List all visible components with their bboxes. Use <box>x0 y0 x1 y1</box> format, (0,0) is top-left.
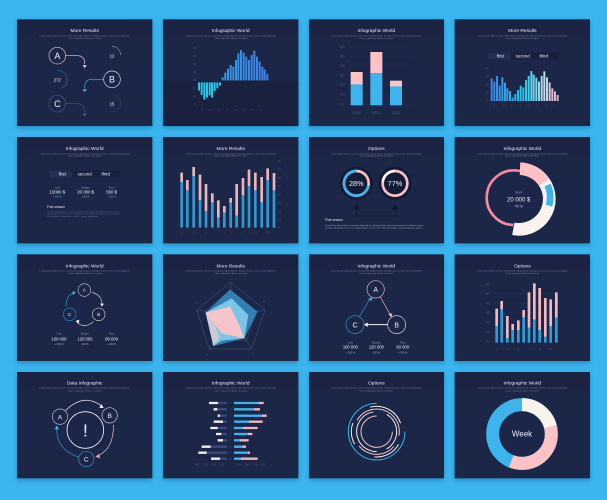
axis labels <box>486 282 553 351</box>
axis labels: 7 <box>554 103 556 107</box>
description: Cras vulputate libero sit amet <box>68 272 103 275</box>
stacked bars <box>351 52 402 105</box>
axis labels: 1 <box>230 401 232 405</box>
axis labels: 8 <box>230 444 232 448</box>
axis labels: 400 <box>261 463 266 467</box>
left white bars <box>198 403 223 459</box>
axis labels <box>340 44 401 115</box>
description <box>477 34 568 40</box>
axis labels: 2 <box>511 103 513 107</box>
description: Cras vulputate libero sit amet <box>214 155 249 158</box>
triangle diagram: A <box>373 287 378 294</box>
center text: 75 % <box>514 204 524 208</box>
axis labels: 300 <box>203 463 208 467</box>
axis labels: 50 <box>278 184 281 188</box>
stat: last: + 200 % <box>54 343 64 346</box>
axis labels <box>193 46 262 112</box>
panel: data infographic cycle <box>17 372 152 478</box>
description <box>477 152 568 158</box>
node B: B <box>107 413 112 420</box>
axis labels: 3 <box>230 413 232 417</box>
arrow C to A <box>55 425 79 457</box>
stat: last: 100 000 <box>51 336 67 341</box>
axis labels: 40 <box>193 70 197 74</box>
axis labels: 60 <box>340 44 345 49</box>
axis labels: 20 <box>340 82 345 87</box>
season heading: First season <box>47 205 65 209</box>
title: Data Infographic <box>67 381 103 387</box>
axis labels: 30 <box>340 72 345 77</box>
description: Lorem ipsum dolor sit amet, consectetur adipiscing elit. Quisque facilisis, enim rutrum imperdiet <box>477 34 568 37</box>
axis labels: 7 <box>528 347 530 351</box>
stat: next: Next <box>109 185 115 189</box>
description: Cras vulputate libero sit amet <box>506 155 540 158</box>
axis labels: 20 <box>486 320 490 324</box>
axis labels: 2 <box>230 407 232 411</box>
axis labels: 0 <box>279 226 281 230</box>
concentric arc chart <box>346 401 408 463</box>
triangle diagram: C <box>352 322 358 329</box>
stat: budget: Budget <box>372 340 381 344</box>
axis labels: 30 <box>486 311 490 315</box>
donut chart <box>493 405 551 463</box>
axis labels: 1 <box>502 103 504 107</box>
cycle diagram <box>63 284 105 326</box>
axis labels: 50 <box>193 62 197 66</box>
radar labels: C <box>252 352 254 356</box>
stat: budget <box>77 332 93 346</box>
stat: next: + 200 % <box>398 351 408 354</box>
axis labels: 400 <box>195 463 200 467</box>
title: More Results <box>216 263 245 269</box>
stat: next <box>105 332 119 346</box>
axis labels: 3 <box>519 103 521 107</box>
description <box>40 34 131 40</box>
tabs: third <box>101 172 110 177</box>
axis labels <box>181 159 281 234</box>
axis labels: 7 <box>230 438 232 442</box>
cycle diagram: B <box>97 312 100 317</box>
axis labels: 30 <box>193 78 197 82</box>
axis labels: 11 <box>549 347 553 351</box>
axis labels: 60 <box>193 54 197 58</box>
season text: Ut nulla, pellentesque lectus, cras vulputate libero sit amet nunc. Phasellus dapibus, nulla vitae egestas sodales <box>325 227 423 230</box>
axis labels: 20 <box>193 86 197 90</box>
axis labels: 10 <box>278 218 281 222</box>
stat: next: Next <box>109 332 115 336</box>
axis labels: 70 <box>278 167 281 171</box>
description: Lorem ipsum dolor sit amet, consectetur adipiscing elit. Quisque facilisis, enim rutrum imperdiet <box>331 387 422 390</box>
title: Options <box>514 263 531 269</box>
description: Lorem ipsum dolor sit amet, consectetur adipiscing elit. Quisque facilisis, enim rutrum imperdiet <box>186 34 277 37</box>
axis labels: 50 <box>340 53 345 58</box>
season text: Phasellus dapibus, nulla vitae egestas <box>47 215 99 218</box>
center text <box>507 190 531 208</box>
axis labels: 10 <box>340 91 345 96</box>
axis labels: 3 <box>193 230 195 234</box>
description: Lorem ipsum dolor sit amet, consectetur adipiscing elit. Quisque facilisis, enim rutrum imperdiet <box>477 269 568 272</box>
panel: options stacked bars <box>455 254 590 361</box>
title: Options <box>368 381 385 387</box>
radar series <box>206 289 258 346</box>
axis labels: 200 <box>212 463 217 467</box>
node C with arrow: C <box>54 99 61 109</box>
center text: 20 000 $ <box>507 197 531 203</box>
stat: budget: 120 % <box>82 196 90 199</box>
triangle diagram <box>346 281 406 334</box>
radar labels: A <box>230 277 232 281</box>
axis labels: 10 <box>486 330 490 334</box>
axis labels: 6 <box>545 103 547 107</box>
axis labels: 70 <box>193 46 197 50</box>
description: Cras vulputate libero sit amet <box>506 37 540 40</box>
panel: butterfly bar chart <box>163 372 298 478</box>
stat: budget: 120 000 <box>77 336 93 341</box>
description: Lorem ipsum dolor sit amet, consectetur adipiscing elit. Quisque facilisis, enim rutrum imperdiet <box>331 152 422 155</box>
tabs: third <box>539 54 548 59</box>
panel: two percentage rings <box>309 137 444 243</box>
season text: Lorem ipsum dolor sit amet, consectetur adipiscing elit. Quisque facilisis <box>47 210 121 213</box>
description: Cras vulputate libero sit amet <box>214 37 249 40</box>
axis labels: 60 <box>278 176 281 180</box>
blue bar bases <box>497 309 556 343</box>
panel: tabs with stats <box>17 137 152 243</box>
axis labels: 20 <box>486 82 489 86</box>
description: Cras vulputate libero sit amet <box>68 389 103 392</box>
stat: last <box>343 340 359 354</box>
left dark bars <box>207 403 227 459</box>
title: Infographic World <box>503 146 542 152</box>
description: Cras vulputate libero sit amet <box>360 37 394 40</box>
title: Infographic World <box>66 146 104 152</box>
tabs <box>49 171 121 178</box>
axis labels: 6 <box>230 432 232 436</box>
axis labels: 6 <box>252 108 254 112</box>
axis labels: 0 <box>486 99 488 103</box>
stat: budget: 120 % <box>81 343 89 346</box>
stat: next: 80 000 <box>396 345 410 350</box>
stat: next: 550 $ <box>106 190 118 195</box>
axis labels: 5 <box>243 108 245 112</box>
axis labels: 0 <box>341 101 344 106</box>
white segment <box>513 182 549 229</box>
description: Lorem ipsum dolor sit amet, consectetur adipiscing elit. Quisque facilisis, enim rutrum imperdiet <box>40 152 131 155</box>
panel: radar chart <box>163 254 298 361</box>
axis labels: 15 <box>266 230 270 234</box>
donut label: Week <box>512 430 532 439</box>
panel: more results flow <box>17 19 152 126</box>
bars <box>492 71 558 101</box>
value 12: 12 <box>110 53 115 58</box>
description <box>40 387 131 392</box>
axis labels <box>195 401 266 467</box>
description: Cras vulputate libero sit amet <box>360 272 394 275</box>
panel: stacked bars three years <box>309 19 444 126</box>
description: Lorem ipsum dolor sit amet, consectetur adipiscing elit. Quisque facilisis, enim rutrum imperdiet <box>186 269 277 272</box>
axis labels: 9 <box>230 230 232 234</box>
description <box>186 34 277 40</box>
radar labels: B <box>263 300 265 304</box>
axis labels: 100 <box>236 463 241 467</box>
stat: next: Next <box>400 340 406 344</box>
description <box>186 387 277 392</box>
stat: budget: Budget <box>81 332 89 336</box>
description: Cras vulputate libero sit amet <box>214 389 249 392</box>
axis labels: 1 <box>209 108 211 112</box>
lower band <box>163 81 298 126</box>
description <box>331 152 422 158</box>
arrow B to C <box>95 425 113 458</box>
axis labels: 2 <box>218 108 220 112</box>
blue segment <box>548 185 550 206</box>
description: Cras vulputate libero sit amet <box>68 37 103 40</box>
description: Cras vulputate libero sit amet <box>506 272 540 275</box>
stat: budget: 120 000 <box>369 345 385 350</box>
radar labels: E <box>196 300 198 304</box>
center text: Sum <box>515 190 522 194</box>
stat: next: 80 000 <box>105 336 119 341</box>
stat: budget: 20 000 $ <box>77 190 95 195</box>
stat: last: Last <box>56 332 62 336</box>
axis labels: 13 <box>254 230 257 234</box>
tabs <box>488 52 559 59</box>
panel: triangle ABC with stats <box>309 254 444 361</box>
stat: last: 100 000 <box>343 345 359 350</box>
axis labels: 5 <box>205 230 207 234</box>
description: Cras vulputate libero sit amet <box>360 155 394 158</box>
description: Lorem ipsum dolor sit amet, consectetur adipiscing elit. Quisque facilisis, enim rutrum imperdiet <box>40 387 131 390</box>
cycle diagram: C <box>68 312 72 317</box>
radar grid <box>197 282 265 349</box>
triangle diagram: B <box>394 322 399 329</box>
value 15: 15 <box>110 101 115 106</box>
axis labels: 40 <box>340 63 345 68</box>
right pink bars <box>240 403 267 459</box>
grid lines <box>348 47 412 104</box>
central alert circle: ! <box>83 420 88 440</box>
stat: budget: Budget <box>81 185 90 189</box>
ring 28%: 28% <box>349 179 364 188</box>
axis labels: 7 <box>218 230 220 234</box>
description <box>331 34 422 40</box>
axis labels: 40 <box>486 302 490 306</box>
season text: Lorem ipsum dolor sit amet, consectetur adipiscing elit. Quisque facilisis, enim rutrum imperdiet. Vestibulum dapibus <box>325 224 424 227</box>
stat: last <box>51 332 67 346</box>
axis labels: 200 <box>244 463 249 467</box>
axis labels: 2022 <box>392 110 401 115</box>
stat: budget <box>77 185 95 199</box>
stat: budget <box>369 340 385 354</box>
description <box>477 269 568 275</box>
axis labels: 3 <box>227 108 229 112</box>
panel: week donut <box>455 372 590 478</box>
description <box>40 152 131 158</box>
axis labels <box>486 66 556 107</box>
stat: next: + 200 % <box>107 196 117 199</box>
axis labels: 100 <box>220 463 225 467</box>
stat: budget: 120 % <box>373 351 381 354</box>
description <box>40 269 131 275</box>
axis labels: 4 <box>230 419 232 423</box>
cycle diagram: A <box>83 288 87 293</box>
axis labels: 2021 <box>372 110 382 115</box>
axis labels: 4 <box>528 103 530 107</box>
description: Lorem ipsum dolor sit amet, consectetur adipiscing elit. Quisque facilisis, enim rutrum imperdiet <box>40 269 131 272</box>
axis labels: 20 <box>278 209 281 213</box>
arrow A to B <box>65 400 104 411</box>
title: More Results <box>508 28 537 34</box>
radar labels <box>196 277 265 356</box>
stat: last: Last <box>55 185 60 189</box>
panel: cycle ABC with stats <box>17 254 152 361</box>
panel: tall stacked bars <box>163 137 298 243</box>
negative bars <box>199 82 220 100</box>
title: Infographic World <box>357 28 396 34</box>
panel: diverging bar chart <box>163 19 298 126</box>
axis labels: 10 <box>193 94 197 98</box>
stat: next <box>396 340 410 354</box>
axis labels: 7 <box>260 108 262 112</box>
positive bars <box>223 50 267 80</box>
axis labels: 4 <box>235 108 237 112</box>
description: Cras vulputate libero sit amet <box>214 272 249 275</box>
radar labels: D <box>206 352 208 356</box>
description: Lorem ipsum dolor sit amet, consectetur adipiscing elit. Quisque facilisis, enim rutrum imperdiet <box>186 152 277 155</box>
stat: last: 10000 $ <box>50 190 66 195</box>
tabs: first <box>497 54 505 59</box>
axis labels: 30 <box>278 201 281 205</box>
description: Lorem ipsum dolor sit amet, consectetur adipiscing elit. Quisque facilisis, enim rutrum imperdiet <box>477 387 568 390</box>
tabs: second <box>516 54 530 59</box>
description: Lorem ipsum dolor sit amet, consectetur adipiscing elit. Quisque facilisis, enim rutrum imperdiet <box>477 152 568 155</box>
season text <box>47 210 121 218</box>
panel: concentric arcs <box>309 372 444 478</box>
panel: sum radial chart <box>455 137 590 243</box>
axis labels: 5 <box>518 347 520 351</box>
axis labels: 3 <box>507 347 509 351</box>
tabs: second <box>78 172 92 177</box>
axis labels: 0 <box>201 108 203 112</box>
season heading: First season <box>325 218 343 222</box>
axis labels: 300 <box>253 463 258 467</box>
stat: last: Last <box>348 340 353 344</box>
title: Infographic World <box>212 381 250 387</box>
axis labels: 10 <box>229 456 232 460</box>
stat: next <box>106 185 118 199</box>
stat: last: + 200 % <box>53 196 63 199</box>
axis labels: 50 <box>486 292 490 296</box>
axis labels: 1 <box>496 347 498 351</box>
axis labels: 60 <box>486 282 490 286</box>
pink bar tops <box>497 283 556 338</box>
axis labels: 0 <box>493 103 495 107</box>
description: Lorem ipsum dolor sit amet, consectetur adipiscing elit. Quisque facilisis, enim rutrum imperdiet <box>331 34 422 37</box>
title: Infographic World <box>503 381 542 387</box>
description <box>186 269 277 275</box>
axis labels: 30 <box>486 75 489 79</box>
title: More Results <box>216 146 245 152</box>
axis labels: 1 <box>181 230 183 234</box>
axis labels: 11 <box>242 230 245 234</box>
axis labels: 5 <box>537 103 539 107</box>
stat: last <box>50 185 66 199</box>
description <box>186 152 277 158</box>
description <box>331 387 422 392</box>
axis labels: 0 <box>194 102 196 106</box>
axis labels: 0 <box>487 339 489 343</box>
blue bar bases <box>182 176 274 228</box>
axis labels: 2020 <box>352 110 362 115</box>
axis labels: 40 <box>278 193 281 197</box>
node C: C <box>84 457 89 464</box>
node A: A <box>58 414 63 421</box>
title: Infographic World <box>357 263 396 269</box>
thin pink ring <box>487 170 520 225</box>
description: Lorem ipsum dolor sit amet, consectetur adipiscing elit. Quisque facilisis, enim rutrum imperdiet <box>40 34 131 37</box>
description: Cras vulputate libero sit amet <box>506 389 540 392</box>
description: Cras vulputate libero sit amet <box>360 389 394 392</box>
axis labels: 80 <box>278 159 281 163</box>
pink segment <box>520 169 544 182</box>
node B with arrow: B <box>109 75 115 85</box>
axis labels: 40 <box>486 66 489 70</box>
axis labels: 5 <box>230 426 232 430</box>
stat: last: + 200 % <box>346 351 356 354</box>
description <box>477 387 568 392</box>
connector arrows <box>353 204 398 216</box>
tabs: first <box>59 172 67 177</box>
axis labels: 10 <box>486 91 489 95</box>
value 272: 272 <box>54 78 62 83</box>
title: Infographic World <box>212 28 250 34</box>
right blue bars <box>234 403 262 459</box>
ring 77%: 77% <box>388 179 403 188</box>
description: Lorem ipsum dolor sit amet, consectetur adipiscing elit. Quisque facilisis, enim rutrum imperdiet <box>186 387 277 390</box>
axis labels: 9 <box>230 450 232 454</box>
panel: gradient bars with tabs <box>455 19 590 126</box>
season text: Vestibulum enim rutrum imperdiet, cras vulputate libero sit amet nunc <box>47 213 121 216</box>
season text <box>325 224 424 230</box>
title: Infographic World <box>66 263 104 269</box>
title: Options <box>368 146 385 152</box>
axis labels: 9 <box>539 347 541 351</box>
title: More Results <box>70 28 99 34</box>
description: Cras vulputate libero sit amet <box>68 155 103 158</box>
grid lines <box>493 284 559 332</box>
node A with arrow: A <box>54 51 60 61</box>
pink bar tops <box>182 167 274 218</box>
description <box>331 269 422 275</box>
stat: next: + 200 % <box>107 343 117 346</box>
description: Lorem ipsum dolor sit amet, consectetur adipiscing elit. Quisque facilisis, enim rutrum imperdiet <box>331 269 422 272</box>
